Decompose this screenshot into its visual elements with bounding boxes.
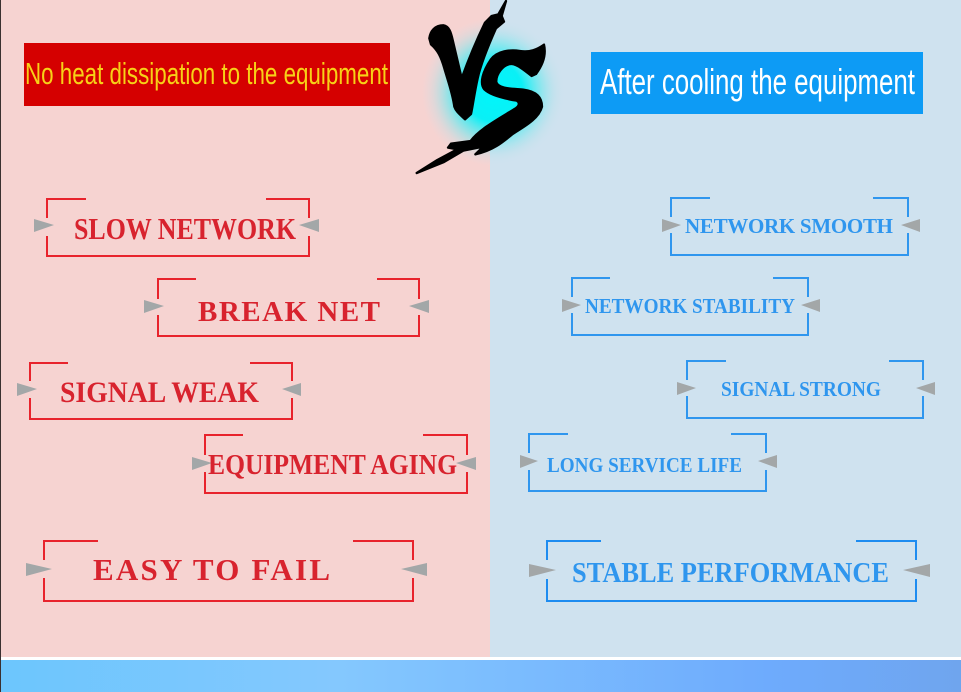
tag: stable performance bbox=[529, 541, 930, 601]
icon: VS emblem bbox=[417, 1, 566, 173]
tag: equipment aging: EQUIPMENT AGING bbox=[208, 449, 457, 481]
tag: long service life bbox=[520, 434, 777, 491]
tag: signal weak: SIGNAL WEAK bbox=[60, 376, 260, 409]
tag: signal strong: SIGNAL STRONG bbox=[721, 377, 881, 401]
tag: network stability: NETWORK STABILITY bbox=[585, 294, 795, 318]
tag: break net: BREAK NET bbox=[198, 296, 380, 328]
tag: easy to fail: EASY TO FAIL bbox=[93, 552, 330, 587]
tag: network stability bbox=[562, 278, 820, 335]
tag: slow network: SLOW NETWORK bbox=[74, 211, 296, 246]
tag: stable performance: STABLE PERFORMANCE bbox=[572, 558, 889, 589]
tag: equipment aging bbox=[192, 435, 476, 493]
heading: right bbox=[591, 52, 923, 114]
bottom gradient band bbox=[0, 660, 961, 692]
tag: long service life: LONG SERVICE LIFE bbox=[547, 453, 742, 477]
tag: easy to fail bbox=[26, 541, 427, 601]
panel: left background bbox=[0, 0, 490, 657]
heading: left: No heat dissipation to the equipment bbox=[25, 56, 388, 91]
tag: network smooth: NETWORK SMOOTH bbox=[685, 214, 893, 238]
tag: signal strong bbox=[677, 361, 935, 418]
panel: right background bbox=[490, 0, 961, 657]
heading: left bbox=[24, 43, 390, 106]
tag: signal weak bbox=[17, 363, 301, 419]
tag: break net bbox=[144, 279, 429, 336]
tag: slow network bbox=[34, 199, 319, 256]
tag: network smooth bbox=[662, 198, 920, 255]
